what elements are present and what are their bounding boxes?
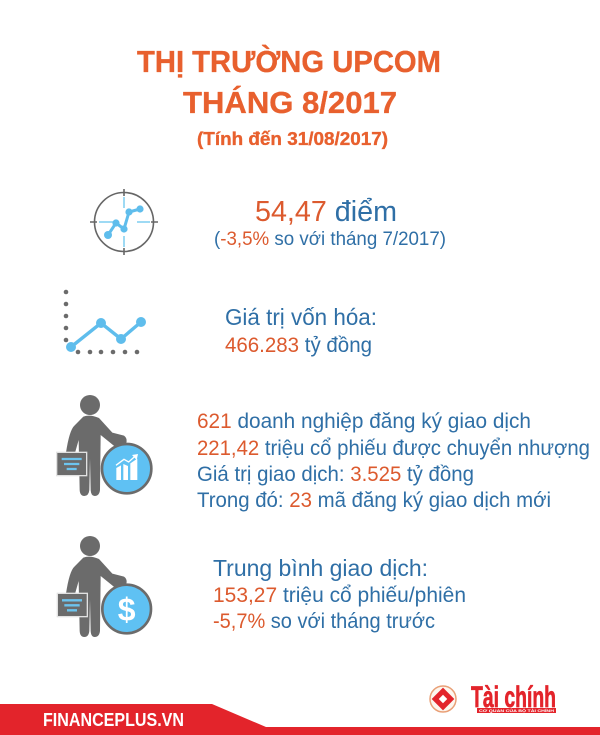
text: trading statistics: 221,42 triệu cổ phiếu được chuyển nhượng <box>197 437 590 460</box>
title: (Tính đến 31/08/2017) <box>197 129 388 149</box>
footer band <box>0 704 600 735</box>
icon: line chart with dotted axes <box>64 290 146 354</box>
text: trading statistics: Giá trị giao dịch: 3.525 tỷ đồng <box>197 463 474 486</box>
logo: Tài chính wordmark <box>471 681 556 714</box>
text: average trading: -5,7% so với tháng trước <box>213 610 435 633</box>
icon: person with growth chart coin <box>57 395 151 496</box>
text: market capitalisation <box>225 304 377 357</box>
icon: target with chart line <box>90 189 158 255</box>
footer site name: FINANCEPLUS.VN <box>43 710 184 730</box>
text: average trading <box>213 555 466 633</box>
text: index points <box>214 196 446 250</box>
logo: Tài chính wordmark: CƠ QUAN CỦA BỘ TÀI CHÍNH <box>479 708 555 713</box>
text: trading statistics: Trong đó: 23 mã đăng ký giao dịch mới <box>197 489 551 512</box>
text: trading statistics: 621 doanh nghiệp đăng ký giao dịch <box>197 410 531 433</box>
text: market capitalisation: 466.283 tỷ đồng <box>225 334 372 357</box>
logo: Tài chính emblem <box>430 686 456 712</box>
text: trading statistics <box>197 410 590 512</box>
title <box>137 43 441 149</box>
title: THÁNG 8/2017 <box>183 85 397 120</box>
icon: person with dollar coin: $ <box>118 591 136 627</box>
title: THỊ TRƯỜNG UPCOM <box>137 43 441 79</box>
logo: Tài chính wordmark: Tài chính <box>471 681 556 714</box>
text: average trading: Trung bình giao dịch: <box>213 555 428 581</box>
text: index points: (-3,5% so với tháng 7/2017) <box>214 229 446 250</box>
text: average trading: 153,27 triệu cổ phiếu/phiên <box>213 584 466 607</box>
text: index points: 54,47 điểm <box>255 196 397 228</box>
text: market capitalisation: Giá trị vốn hóa: <box>225 304 377 330</box>
icon: person with dollar coin <box>57 536 151 637</box>
